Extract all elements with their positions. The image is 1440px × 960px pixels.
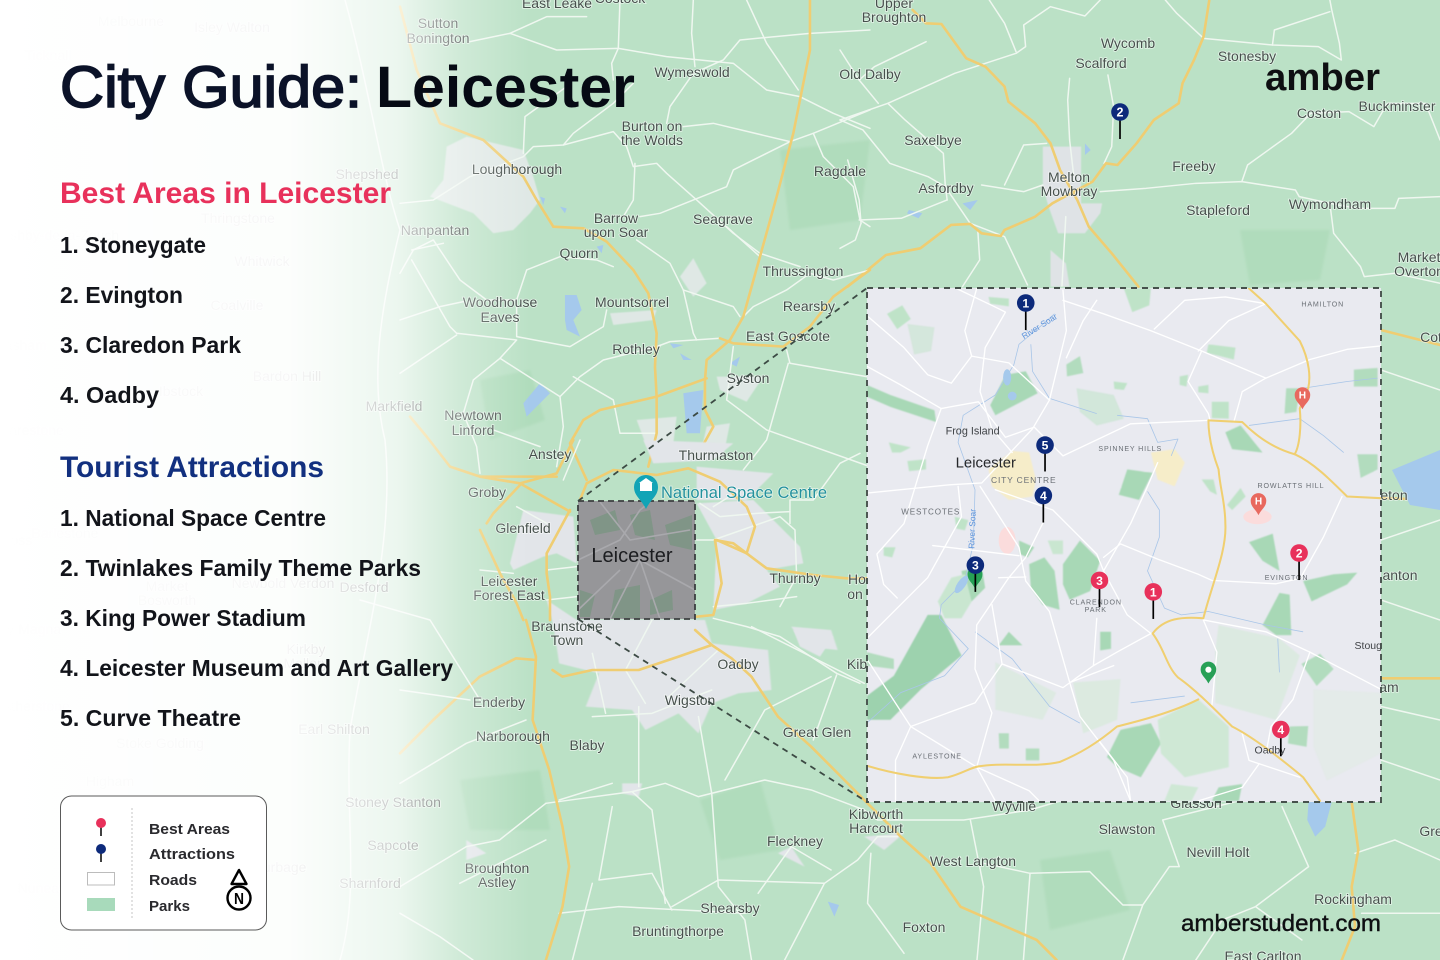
legend (60, 796, 266, 930)
map place labels: the Wolds (621, 132, 683, 148)
map place labels: West Langton (930, 853, 1016, 869)
map place labels: Rearsby (783, 298, 835, 314)
map place labels: Nanpantan (401, 222, 469, 238)
inset labels: Leicester (956, 456, 1016, 472)
inset POI markers: H (1299, 391, 1306, 402)
map place labels: Coston (1297, 105, 1341, 121)
inset labels: AYLESTONE (912, 752, 962, 760)
map place labels: Stapleford (1186, 202, 1250, 218)
map place labels: Freeby (1172, 158, 1216, 174)
inset labels: HAMILTON (1301, 301, 1344, 309)
zoom source box: Leicester (578, 501, 695, 619)
map place labels: Wigston (665, 692, 715, 708)
inset labels: Frog Island (946, 425, 1000, 437)
east and west edge roads (340, 0, 1440, 960)
map place labels: Barrow (594, 210, 639, 226)
attraction pins (967, 294, 1054, 592)
inset labels: CLARENDON (1070, 599, 1122, 607)
heading: tourist attractions: Tourist Attractions (60, 451, 324, 484)
map place labels: Glasson (1170, 795, 1222, 811)
attraction pins: 5 (1042, 438, 1049, 452)
map place labels: Earl Shilton (298, 721, 370, 737)
map place labels: Mallory (283, 655, 329, 671)
map place labels: Rockingham (1314, 891, 1392, 907)
title: Leicester (376, 55, 635, 120)
map place labels: Shepshed (335, 166, 399, 182)
map place labels: Burton on (622, 118, 682, 134)
map place labels: Stoney Stanton (345, 794, 441, 810)
map place labels: Eaves (481, 309, 519, 325)
map place labels: Melbourne (98, 13, 164, 29)
heading: best areas: Best Areas in Leicester (60, 177, 391, 210)
map place labels: Glenfield (495, 520, 551, 536)
map place labels: Astley (478, 874, 516, 890)
list: best areas: 4. Oadby (60, 382, 159, 408)
zoom source box: Leicester: Leicester (591, 545, 673, 567)
map place labels: Burbage (254, 859, 307, 875)
map place labels: Coalville (211, 297, 264, 313)
map place labels: Fleckney (767, 833, 823, 849)
map place labels: Markfield (366, 398, 422, 414)
map place labels: Old Dalby (839, 66, 901, 82)
attraction pin 2 (outside inset): 2 (1117, 106, 1124, 120)
list: best areas: 1. Stoneygate (60, 232, 206, 258)
map place labels: Sharnford (339, 875, 401, 891)
lake (1307, 802, 1332, 837)
attraction pins: 3 (972, 559, 979, 573)
inset labels: EVINGTON (1265, 574, 1308, 582)
inset labels: ROWLATTS HILL (1258, 482, 1324, 490)
map place labels: Kib (847, 656, 867, 672)
map place labels: Sutton (418, 15, 458, 31)
legend swatch: roads (88, 872, 114, 885)
list: best areas: 3. Claredon Park (60, 332, 241, 358)
map place labels: East Goscote (746, 328, 830, 344)
map place labels: Kirkby (287, 641, 325, 657)
map place labels: Sapcote (367, 837, 419, 853)
map place labels: Asfordby (918, 180, 974, 196)
best area pins: 1 (1150, 585, 1157, 599)
map place labels: Bardon Hill (253, 368, 321, 384)
map place labels: Leicester (481, 573, 538, 589)
soft park shading (460, 140, 1330, 930)
top right area: Melton Mowbray (840, 0, 1440, 287)
icon: north arrow: N (234, 891, 244, 908)
map place labels: Seagrave (693, 211, 753, 227)
map place labels: anton (1382, 567, 1418, 583)
legend icon: attractions (96, 844, 106, 862)
map place labels: Foxton (903, 919, 945, 935)
list: tourist attractions: 2. Twinlakes Family Theme Parks (60, 555, 421, 581)
inset labels: Stoug (1355, 641, 1382, 652)
list: tourist attractions: 4. Leicester Museum and Art Gallery (60, 655, 453, 681)
map place labels: upon Soar (584, 224, 649, 240)
map place labels: Ibstock (159, 383, 204, 399)
map place labels: Nevill Holt (1186, 844, 1250, 860)
legend swatch: parks (87, 898, 115, 911)
map pin: National Space Centre (634, 475, 827, 509)
map place labels: Nuneaton (18, 880, 78, 896)
map place labels: Stonesby (1218, 48, 1276, 64)
inset yellow roads (867, 288, 1381, 801)
map place labels: Newtown (444, 407, 502, 423)
map place labels: Ragdale (814, 163, 866, 179)
map place labels: Ticknall (25, 47, 71, 63)
map place labels: Slawston (1099, 821, 1155, 837)
map place labels: Anstey (529, 446, 571, 462)
inset POI markers (968, 387, 1310, 684)
map place labels: Wycomb (1101, 35, 1155, 51)
map place labels: Newbold Verdon (232, 575, 334, 591)
map place labels: Barlestone (32, 525, 99, 541)
map place labels: Broughton (465, 860, 529, 876)
map place labels: Shearsby (700, 900, 760, 916)
attraction pins: 1 (1022, 296, 1029, 310)
map place labels: Groby (468, 484, 506, 500)
map place labels: Isley Walton (194, 19, 270, 35)
map place labels: Quorn (560, 245, 598, 261)
map place labels: Kibworth (849, 806, 903, 822)
map place labels: Mowbray (1041, 183, 1097, 199)
icon: north arrow (228, 870, 250, 910)
map place labels: Market (146, 578, 188, 594)
map place labels: Bosworth (138, 592, 196, 608)
inset hospital blobs (1243, 509, 1272, 524)
inset labels: River Soar (1020, 311, 1059, 341)
map place labels: Ho (848, 571, 866, 587)
map place labels: Bruntingthorpe (632, 923, 724, 939)
map place labels: Scalford (1075, 55, 1127, 71)
map place labels: Loughborough (472, 161, 562, 177)
map place labels: Market (1398, 249, 1440, 265)
map place labels: Woodhouse (463, 294, 537, 310)
map place labels: Linford (452, 422, 494, 438)
map place labels: on (847, 586, 863, 602)
website: amberstudent.com (1181, 910, 1381, 936)
inset labels: River Soar (966, 509, 978, 549)
map place labels: Wymeswold (654, 64, 730, 80)
map place labels: Braunstone (531, 618, 603, 634)
map place labels: Enderby (473, 694, 525, 710)
best area pins: 2 (1296, 546, 1303, 560)
legend labels: Roads (149, 872, 197, 889)
best area pins: 3 (1096, 574, 1103, 588)
map place labels: Forest East (473, 587, 545, 603)
map place labels: am (1379, 679, 1399, 695)
map place labels: Whitwick (234, 253, 291, 269)
title: City Guide: (60, 55, 362, 120)
list: tourist attractions: 3. King Power Stadium (60, 605, 306, 631)
map place labels: Higham (86, 773, 134, 789)
inset labels: Oadby (1255, 746, 1286, 757)
map place labels: Saxelbye (904, 132, 962, 148)
legend icon: best areas (96, 818, 106, 836)
map place labels: Harcourt (849, 820, 903, 836)
map place labels: Buckminster (1358, 98, 1436, 114)
map place labels: Broughton (862, 9, 926, 25)
logo: amber: amber (1265, 57, 1380, 99)
map place labels: Ashby-de-la-Zouch (1, 227, 119, 243)
list: tourist attractions (60, 505, 453, 731)
best area pins: 4 (1277, 723, 1284, 737)
left white fade (0, 0, 530, 960)
attraction pin 2 (outside inset) (1111, 103, 1129, 139)
zoom connector lines (578, 288, 867, 802)
map place labels: Thringstone (201, 210, 275, 226)
south area: Wigston to Foxton (400, 620, 1440, 960)
map place labels: Great Glen (783, 724, 851, 740)
legend labels (149, 821, 235, 915)
map place labels: Blaby (569, 737, 605, 753)
inset map panel (867, 288, 1382, 802)
inset labels: CITY CENTRE (991, 475, 1056, 485)
yellow patches (989, 449, 1185, 500)
map place labels: Oadby (717, 656, 759, 672)
central area: Leicester urban ring (480, 440, 867, 740)
legend labels: Parks (149, 898, 190, 915)
map place labels: eton (1380, 487, 1408, 503)
inset labels: SPINNEY HILLS (1098, 445, 1162, 453)
map place labels: Narborough (476, 728, 550, 744)
list: tourist attractions: 5. Curve Theatre (60, 705, 241, 731)
inset POI markers: H (1255, 497, 1262, 508)
inset rivers (867, 314, 1378, 723)
map place labels: Melton (1048, 169, 1090, 185)
best area pins (1091, 544, 1308, 756)
list: best areas: 2. Evington (60, 282, 183, 308)
map place labels: Wyville (992, 798, 1036, 814)
attraction pins: 4 (1040, 489, 1047, 503)
map place labels: Bonington (406, 30, 470, 46)
map pin: National Space Centre: National Space Centre (661, 484, 827, 502)
map place labels: Rothley (612, 341, 660, 357)
map place labels: Thurmaston (679, 447, 753, 463)
list: tourist attractions: 1. National Space Centre (60, 505, 326, 531)
list: best areas (60, 232, 241, 408)
map place labels: Stoke Golding (116, 735, 204, 751)
map place labels: Thurnby (769, 570, 821, 586)
inset labels: WESTCOTES (901, 507, 960, 516)
map place labels: Town (551, 632, 583, 648)
map place labels: Atherstone (2, 698, 70, 714)
map place labels: Thrussington (763, 263, 843, 279)
top centre area: Loughborough to Syston (400, 0, 870, 480)
inset parks (867, 288, 1381, 801)
inset white roads (867, 288, 1381, 801)
legend labels: Attractions (149, 846, 235, 863)
legend labels: Best Areas (149, 821, 230, 838)
map place labels: Mountsorrel (595, 294, 669, 310)
map place labels: Syston (727, 370, 769, 386)
inset labels (901, 301, 1382, 760)
title (60, 55, 635, 120)
map place labels: Wymondham (1289, 196, 1371, 212)
inset labels: PARK (1085, 606, 1107, 614)
map place labels: Desford (339, 579, 389, 595)
inset dashed border (867, 288, 1381, 802)
